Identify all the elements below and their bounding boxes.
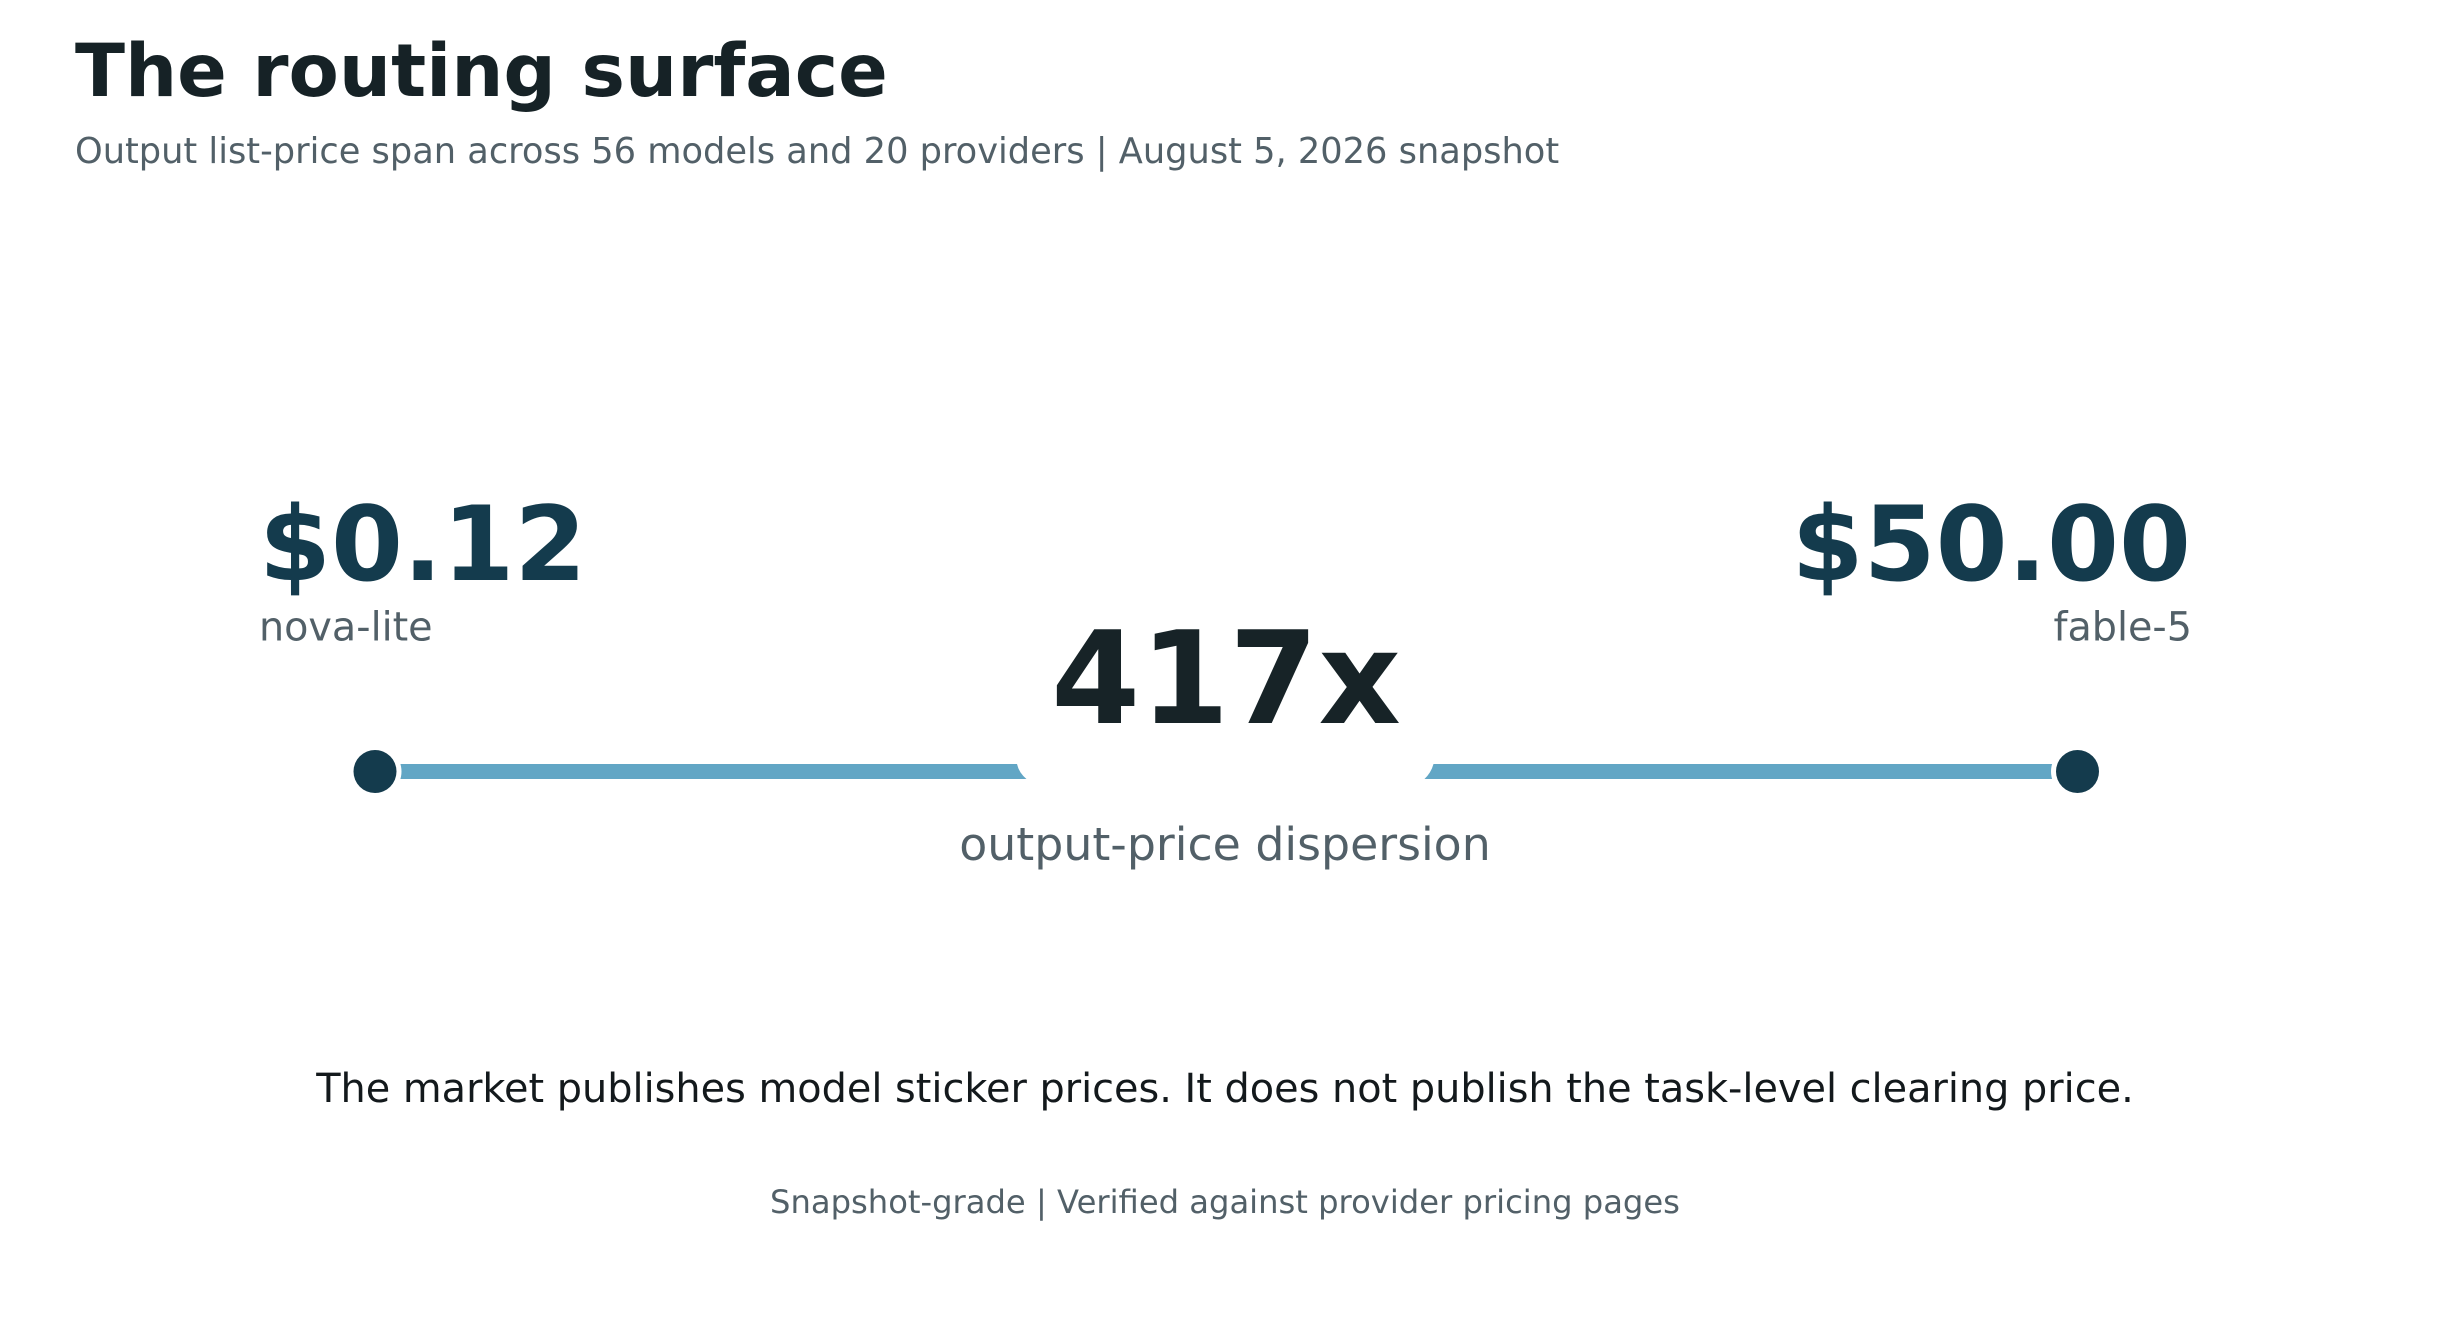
multiplier value: 417x bbox=[1051, 605, 1401, 754]
high price callout bbox=[1792, 485, 2192, 650]
price span line chart bbox=[348, 745, 2104, 798]
low end dot bbox=[348, 745, 402, 798]
title: The routing surface bbox=[75, 29, 888, 114]
low price callout bbox=[259, 485, 586, 650]
multiplier caption: output-price dispersion bbox=[959, 817, 1491, 871]
bar cutout behind multiplier bbox=[1016, 760, 1434, 780]
high end dot bbox=[2051, 745, 2104, 798]
takeaway statement: The market publishes model sticker prices. It does not publish the task-level clearing price. bbox=[315, 1066, 2134, 1112]
source footnote: Snapshot-grade | Verified against provider pricing pages bbox=[770, 1183, 1680, 1221]
span bar bbox=[396, 764, 2056, 779]
subtitle: Output list-price span across 56 models and 20 providers | August 5, 2026 snapshot bbox=[75, 131, 1559, 172]
high price value: $50.00 bbox=[1792, 485, 2191, 605]
low price model name: nova-lite bbox=[259, 604, 433, 650]
high price model name: fable-5 bbox=[2054, 604, 2192, 650]
low price value: $0.12 bbox=[259, 485, 586, 605]
